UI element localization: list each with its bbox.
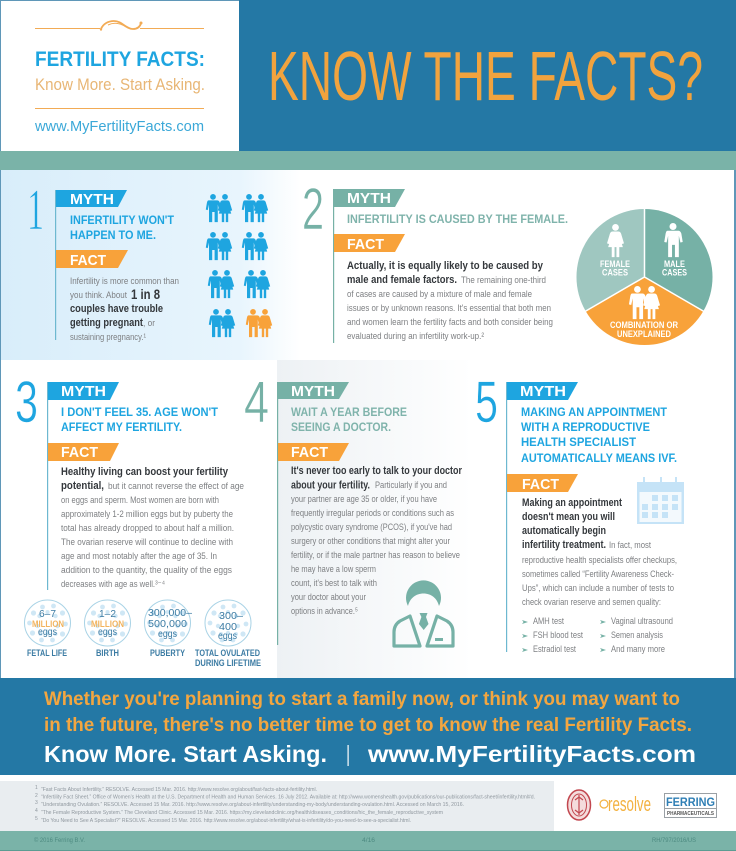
panel: myth 3	[15, 370, 261, 668]
logo: ferring: FERRING	[666, 795, 715, 809]
fact text: doesn't mean you will	[522, 511, 615, 523]
myth flag: MYTH	[347, 190, 391, 207]
fact text: approximately 1-2 million eggs but by puberty the	[61, 509, 233, 520]
test list: Vaginal ultrasound	[611, 616, 673, 627]
fact text: addition to the quantity, the quality of the eggs	[61, 565, 232, 576]
myth statement: HEALTH SPECIALIST	[521, 435, 637, 449]
myth flag	[56, 190, 127, 208]
logo title: FERTILITY FACTS:	[35, 48, 205, 71]
icon: woman	[607, 224, 624, 257]
fact text: surgery or other conditions that might alter your	[291, 536, 451, 547]
egg count: puberty: 500,000	[148, 618, 187, 630]
footer text: © 2016 Ferring B.V.	[34, 837, 85, 844]
number 3: 3	[15, 370, 38, 435]
fact text: Ups”, which can include a number of tests to	[522, 583, 674, 594]
myth flag	[278, 382, 349, 400]
myth statement: WITH A REPRODUCTIVE	[521, 420, 650, 434]
fact text: on eggs and sperm. Most women are born with	[61, 495, 219, 506]
egg count: total ovulated: 300–	[219, 610, 243, 622]
myth statement	[61, 405, 219, 434]
footer text: RH/797/2016/US	[652, 838, 696, 844]
myth flag	[48, 382, 119, 400]
fact text: options in advance.⁵	[291, 606, 358, 617]
fact text: The ovarian reserve will continue to decline with	[61, 537, 233, 548]
egg count: birth: 1–2	[99, 608, 116, 620]
logo: ferring	[664, 794, 716, 818]
footnotes: “Infertility Fact Sheet.” Office of Women's Health at the U.S. Department of Health and Human Services. 16 July 2012. Available at: http://www.womenshealth.gov/publications/our-publications/fact-sheet/infertility.html#d.	[41, 794, 535, 800]
egg count: puberty: eggs	[158, 628, 177, 640]
panel: myth 1	[27, 177, 272, 343]
pie labels: MALE	[664, 259, 685, 269]
egg count: puberty	[144, 600, 192, 658]
myth statement: INFERTILITY WON'T	[70, 213, 175, 227]
egg count: birth: eggs	[98, 626, 117, 638]
footer text	[34, 837, 696, 844]
panel backgrounds	[0, 170, 736, 678]
fact text: The remaining one-third	[461, 275, 546, 286]
call to action text: Whether you're planning to start a family now, or think you may want to	[44, 689, 680, 710]
myth statement: MAKING AN APPOINTMENT	[521, 405, 668, 419]
fact text: but it cannot reverse the effect of age	[108, 481, 244, 492]
fact text: and women learn the fertility facts and both consider being	[347, 317, 553, 328]
myth statement: AFFECT MY FERTILITY.	[61, 420, 182, 434]
footer band	[0, 831, 736, 851]
fact text: Making an appointment	[522, 497, 622, 509]
egg count: puberty: PUBERTY	[150, 648, 185, 658]
pie labels	[600, 259, 687, 339]
fact text: count, it's best to talk with	[291, 578, 377, 589]
fact flag: FACT	[347, 236, 384, 253]
panel: myth 4	[244, 370, 463, 646]
myth statement	[291, 405, 407, 434]
number 2: 2	[302, 177, 324, 242]
footnotes: 5	[35, 816, 38, 822]
logo: resolve: resolve	[608, 794, 651, 816]
footnotes: 1	[35, 785, 38, 791]
fact text: you think. About	[70, 290, 127, 301]
fact text: age and most notably after the age of 35. In	[61, 551, 217, 562]
fact text: decreases with age as well.³⁻⁴	[61, 579, 165, 590]
test list: AMH test	[533, 616, 564, 627]
number 5: 5	[475, 370, 498, 435]
myth flag	[507, 382, 578, 400]
myth flag: MYTH	[70, 191, 114, 208]
website: www.MyFertilityFacts.com	[367, 741, 696, 767]
test list: Estradiol test	[533, 644, 576, 655]
myth statement: SEEING A DOCTOR.	[291, 420, 391, 434]
references panel	[0, 781, 716, 831]
fact flag: FACT	[291, 444, 328, 461]
fact text: check ovarian reserve and semen quality:	[522, 597, 661, 608]
footnotes: “Fast Facts About Infertility.” RESOLVE. Accessed 15 Mar. 2016. http://www.resolve.org/about/fast-facts-about-fertility.html.	[41, 787, 317, 793]
footnotes: 2	[35, 793, 38, 799]
myth statement: AUTOMATICALLY MEANS IVF.	[521, 451, 677, 465]
slogan: Know More. Start Asking.	[44, 741, 327, 767]
fact text: frequently irregular periods or conditions such as	[291, 508, 454, 519]
egg count: total ovulated: eggs	[218, 630, 237, 642]
fact text: 1 in 8	[131, 286, 160, 302]
fact text: automatically begin	[522, 525, 606, 537]
logo: resolve	[600, 794, 651, 816]
myth statement	[521, 405, 677, 465]
fact text: he may have a low sperm	[291, 564, 376, 575]
fact text	[522, 497, 677, 608]
pie chart	[576, 208, 713, 345]
myth statement: HAPPEN TO ME.	[70, 228, 156, 242]
fact text	[61, 466, 244, 590]
egg count: total ovulated: 400	[219, 621, 237, 633]
icon: eight couples, one highlighted	[206, 194, 272, 337]
fact text	[70, 276, 179, 343]
header banner	[0, 0, 736, 170]
egg count: fetal life: FETAL LIFE	[27, 648, 67, 658]
test list	[522, 616, 673, 655]
logo: ferring: PHARMACEUTICALS	[667, 811, 715, 817]
panel: myth 2	[302, 177, 713, 345]
myth flag: MYTH	[61, 383, 106, 400]
pie labels: CASES	[602, 268, 628, 278]
logo url: www.MyFertilityFacts.com	[34, 118, 204, 135]
test list: Semen analysis	[611, 630, 663, 641]
fact text: Actually, it is equally likely to be caused by	[347, 260, 544, 272]
fact flag	[278, 443, 349, 461]
fact text: your partner are age 35 or older, if you have	[291, 494, 437, 505]
test list: And many more	[611, 644, 665, 655]
egg count: birth: BIRTH	[96, 648, 119, 658]
fact text: reproductive health specialists offer checkups,	[522, 555, 677, 566]
footnotes: 3	[35, 800, 38, 806]
logo tagline: Know More. Start Asking.	[35, 76, 205, 94]
fact text: Healthy living can boost your fertility	[61, 466, 229, 478]
footer text: 4/16	[362, 838, 376, 844]
fact text: It's never too early to talk to your doctor	[291, 465, 463, 477]
panel: myth 5	[475, 370, 684, 655]
fact text: fertility, or if the male partner has reason to believe	[291, 550, 460, 561]
fact text: sustaining pregnancy.¹	[70, 332, 146, 343]
fact text: your doctor about your	[291, 592, 367, 603]
flourish	[35, 21, 204, 31]
fact flag	[56, 250, 128, 269]
footnotes: “Understanding Ovulation.” RESOLVE. Accessed 15 Mar. 2016. http://www.resolve.org/about-infertility/understanding-my-body/understanding-ovulation.html. Accessed on March 15, 2016.	[41, 802, 464, 808]
myth flag	[334, 189, 405, 207]
logo: seal	[568, 790, 590, 820]
icon: couple	[629, 286, 660, 319]
egg count: puberty: 300,000–	[148, 607, 192, 619]
fact text: evaluated during an infertility work-up.²	[347, 331, 485, 342]
myth flag: MYTH	[291, 383, 335, 400]
egg count: total ovulated: DURING LIFETIME	[195, 658, 261, 668]
icon: doctor	[394, 580, 453, 646]
fact text	[347, 260, 553, 342]
fact flag: FACT	[61, 444, 98, 461]
number 1: 1	[27, 177, 44, 242]
myth statement: WAIT A YEAR BEFORE	[291, 405, 407, 419]
fact text: of cases are caused by a mixture of male and female	[347, 289, 532, 300]
number 4: 4	[244, 370, 269, 435]
egg count: total ovulated	[195, 600, 261, 668]
egg count: fetal life	[24, 600, 70, 658]
call to action band	[0, 678, 736, 775]
icon: man	[664, 223, 683, 257]
fact text: getting pregnant	[70, 317, 143, 329]
egg count: fetal life: eggs	[38, 626, 57, 638]
footnotes: “Do You Need to See A Specialist?” RESOLVE. Accessed 15 Mar. 2016. http://www.resolve.org/about-infertility/what-is-infertility/do-you-need-to-see-a-specialist.html.	[41, 818, 411, 824]
fact flag	[48, 443, 119, 461]
egg count: fetal life: MILLION	[32, 619, 64, 630]
myth statement	[70, 213, 175, 242]
footnotes: “The Female Reproductive System.” The Cleveland Clinic. Accessed 15 Mar. 2016. https://my.clevelandclinic.org/health/diseases_conditions/hic_the_female_reproductive_system	[41, 810, 443, 816]
egg count: total ovulated: TOTAL OVULATED	[195, 648, 260, 658]
myth statement: I DON'T FEEL 35. AGE WON'T	[61, 405, 219, 419]
fact flag: FACT	[522, 476, 559, 493]
logo box	[0, 0, 239, 151]
myth statement: INFERTILITY IS CAUSED BY THE FEMALE.	[347, 212, 568, 226]
pie labels: COMBINATION OR	[610, 320, 678, 330]
fact text: total has already dropped to about half a million.	[61, 523, 234, 534]
fact flag	[507, 474, 578, 493]
fact text: couples have trouble	[70, 303, 163, 315]
fact text: potential,	[61, 480, 104, 492]
pie labels: UNEXPLAINED	[617, 329, 671, 339]
fact text: issues or by unknown reasons. It's essential that both men	[347, 303, 551, 314]
fact text: about your fertility.	[291, 480, 370, 492]
icon: calendar	[637, 477, 684, 524]
fact text: , or	[143, 318, 156, 329]
fact text: polycystic ovary syndrome (PCOS), if you've had	[291, 522, 452, 533]
fact text	[291, 465, 463, 617]
footnotes: 4	[35, 808, 38, 814]
fact text: sometimes called “Fertility Awareness Check-	[522, 569, 674, 580]
call to action band: in the future, there's no better time to get to know the real Fertility Facts.	[44, 715, 692, 736]
pie labels: CASES	[662, 268, 687, 278]
egg count: birth: MILLION	[91, 619, 124, 630]
myth flag: MYTH	[520, 383, 566, 400]
egg count: fetal life: 6–7	[39, 608, 56, 620]
fact text: Infertility is more common than	[70, 276, 179, 287]
fact text: male and female factors.	[347, 274, 457, 286]
fact flag: FACT	[70, 252, 106, 269]
pie labels: FEMALE	[600, 259, 630, 269]
footnotes	[35, 785, 535, 824]
fact flag	[334, 234, 405, 253]
fact text: infertility treatment.	[522, 539, 606, 551]
test list: FSH blood test	[533, 630, 583, 641]
egg count: birth	[84, 600, 130, 658]
fact text: Particularly if you and	[375, 480, 447, 491]
fact text: In fact, most	[609, 540, 651, 551]
